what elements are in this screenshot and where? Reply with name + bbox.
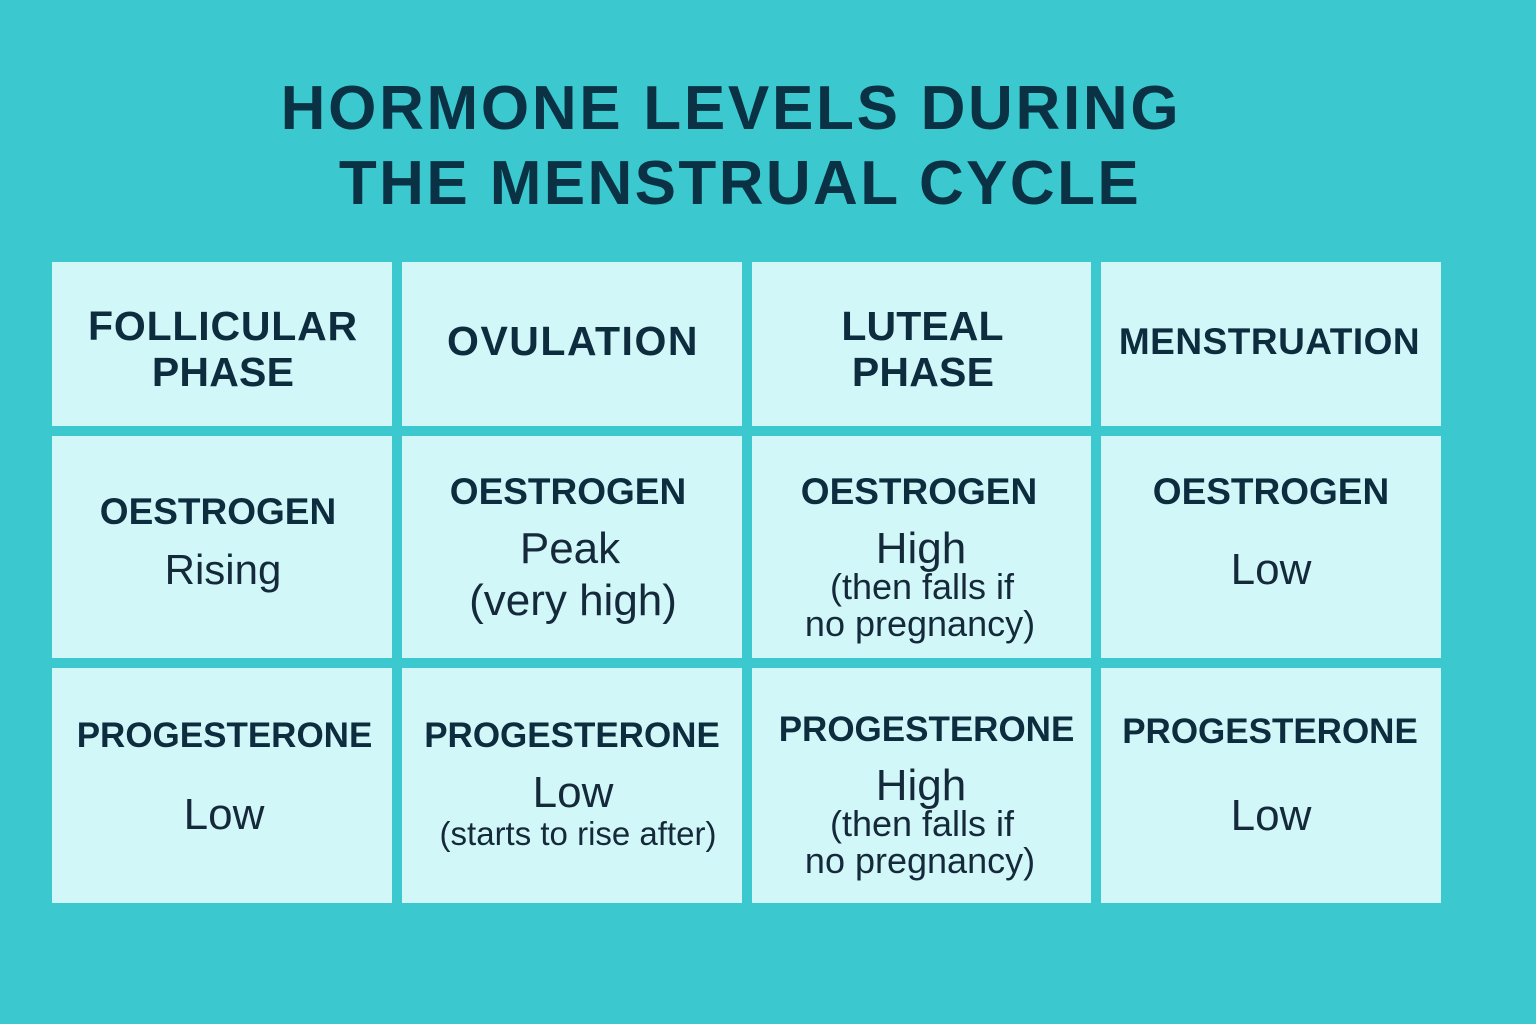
panel: follicular progesterone: Low — [184, 790, 264, 839]
panel: ovulation progesterone: (starts to rise after) — [440, 815, 716, 852]
panel: menstruation oestrogen: OESTROGEN — [1153, 471, 1389, 512]
panel: ovulation oestrogen: (very high) — [469, 576, 677, 625]
panel: luteal progesterone: High — [876, 761, 966, 810]
title: THE MENSTRUAL CYCLE — [339, 149, 1141, 218]
panel: luteal phase header — [752, 262, 1091, 426]
panel: menstruation header: MENSTRUATION — [1119, 321, 1420, 362]
panel: luteal oestrogen — [752, 436, 1091, 658]
panel: luteal oestrogen: (then falls if — [830, 566, 1014, 607]
panel: ovulation oestrogen: Peak — [520, 524, 620, 573]
panel: luteal progesterone: (then falls if — [830, 803, 1014, 844]
panel: menstruation progesterone — [1101, 668, 1441, 903]
panel: ovulation progesterone: Low — [533, 768, 613, 817]
panel: follicular progesterone: PROGESTERONE — [77, 716, 372, 755]
panel: follicular progesterone — [52, 668, 392, 903]
panel: menstruation oestrogen — [1101, 436, 1441, 658]
panel: follicular phase header: PHASE — [152, 349, 294, 395]
panel: luteal oestrogen: High — [876, 524, 966, 573]
panel: ovulation header — [402, 262, 742, 426]
panel: luteal phase header: LUTEAL — [841, 303, 1004, 349]
panel: luteal progesterone: PROGESTERONE — [779, 710, 1074, 749]
panel: luteal oestrogen: no pregnancy) — [805, 603, 1035, 644]
panel: luteal oestrogen: OESTROGEN — [801, 471, 1037, 512]
panel: luteal progesterone — [752, 668, 1091, 903]
panel: ovulation oestrogen — [402, 436, 742, 658]
panel: ovulation progesterone: PROGESTERONE — [424, 716, 720, 755]
panel: ovulation oestrogen: OESTROGEN — [450, 471, 686, 512]
panel: ovulation header: OVULATION — [447, 318, 699, 364]
panel: follicular oestrogen — [52, 436, 392, 658]
title — [281, 74, 1181, 218]
panel: menstruation progesterone: Low — [1231, 791, 1311, 840]
panel: luteal phase header: PHASE — [852, 349, 994, 395]
panel: luteal progesterone: no pregnancy) — [805, 840, 1035, 881]
panel: follicular oestrogen: Rising — [165, 546, 281, 593]
panel: menstruation oestrogen: Low — [1231, 545, 1311, 594]
panel: follicular phase header — [52, 262, 392, 426]
title: HORMONE LEVELS DURING — [281, 74, 1181, 143]
panel: follicular phase header: FOLLICULAR — [88, 303, 358, 349]
panel: ovulation progesterone — [402, 668, 742, 903]
panel: menstruation header — [1101, 262, 1441, 426]
panel: follicular oestrogen: OESTROGEN — [100, 491, 336, 532]
panel: menstruation progesterone: PROGESTERONE — [1122, 712, 1418, 751]
